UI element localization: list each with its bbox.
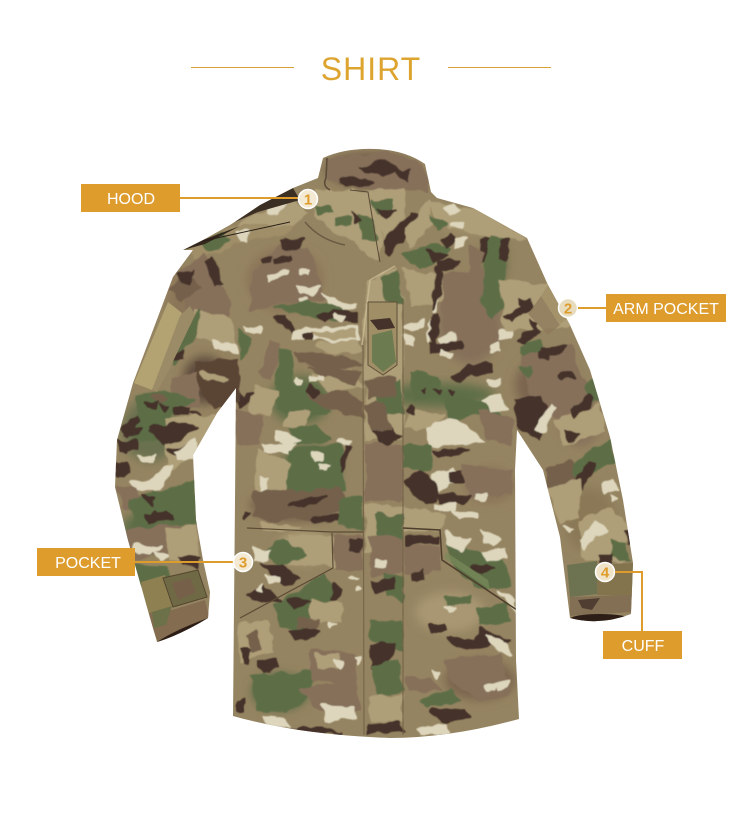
- placket flap: [368, 302, 397, 375]
- drawstring: [468, 205, 515, 224]
- left cuff: [141, 575, 173, 613]
- upper chest right: [403, 244, 450, 268]
- right arm pocket: [541, 285, 568, 324]
- placket upper: [365, 268, 402, 440]
- jacket illustration: [100, 140, 650, 750]
- lower left skirt: [275, 575, 340, 632]
- label: hood: HOOD: [107, 191, 155, 208]
- title: SHIRT: [321, 51, 421, 87]
- placket lower: [366, 445, 402, 500]
- label: pocket: 3: [239, 554, 247, 572]
- label: arm pocket: [558, 294, 726, 322]
- label: cuff: CUFF: [622, 638, 665, 655]
- right cuff: [567, 561, 598, 597]
- left arm velcro patch: [134, 302, 182, 390]
- label: arm pocket: 2: [564, 300, 572, 318]
- label: pocket: [37, 548, 252, 576]
- pockets: [290, 535, 333, 566]
- label: cuff: [596, 562, 682, 659]
- lower left body: [262, 445, 296, 452]
- upper chest left: [250, 245, 325, 310]
- collar: [327, 152, 428, 190]
- hood: [237, 202, 308, 228]
- label: arm pocket: ARM POCKET: [613, 301, 719, 318]
- pocket outlines: [240, 528, 363, 618]
- camo blotches: [115, 152, 630, 735]
- cuff openings: [157, 618, 208, 642]
- front placket seams: [363, 300, 403, 735]
- right sleeve: [500, 280, 570, 330]
- left sleeve: [180, 253, 232, 317]
- label: hood: 1: [304, 192, 312, 208]
- broad colour zones: [122, 154, 616, 710]
- hood lip: [183, 226, 240, 250]
- label: pocket: POCKET: [55, 555, 121, 572]
- label: cuff: 4: [601, 564, 610, 582]
- label: hood: [81, 184, 318, 212]
- lower right body: [405, 470, 440, 505]
- collar details: [325, 158, 330, 190]
